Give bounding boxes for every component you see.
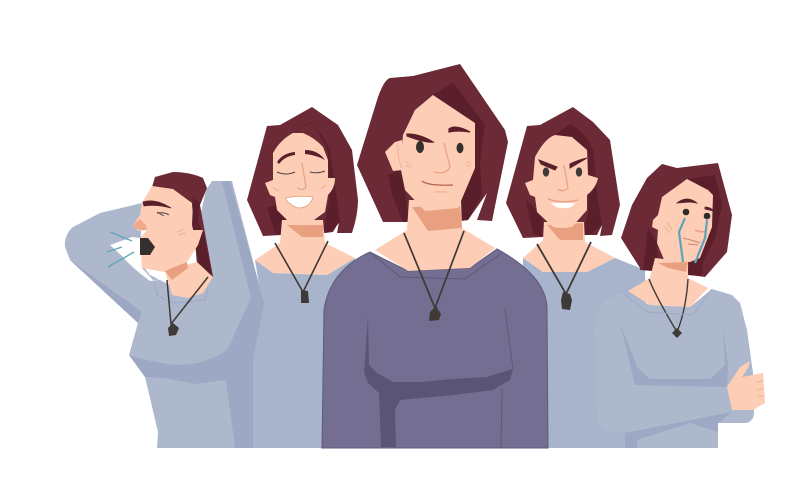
- hair: [357, 64, 508, 222]
- breath lines: [107, 232, 134, 267]
- collar seam: [623, 289, 712, 315]
- hair: [152, 172, 213, 277]
- face: [652, 179, 713, 262]
- chest and neck: [375, 200, 495, 271]
- sweater: [595, 289, 754, 448]
- raised arm and torso: [65, 181, 264, 448]
- open mouth: [140, 238, 155, 255]
- eyebrows: [407, 127, 470, 142]
- sweater folds: [364, 317, 513, 447]
- hair: [621, 163, 732, 277]
- chest and neck: [628, 258, 708, 307]
- figure: laughing woman, second from left: [247, 107, 358, 448]
- yawn puff: [110, 237, 167, 281]
- collar seam: [370, 252, 502, 279]
- nose: [434, 143, 450, 173]
- figure: yawning woman, left: [65, 172, 264, 448]
- sweater folds: [620, 323, 728, 387]
- eyes: [416, 141, 424, 153]
- necklace: [404, 231, 464, 308]
- necklace: [649, 279, 688, 332]
- tears: [679, 218, 707, 263]
- figure: smirking woman, second from right: [506, 107, 650, 448]
- hand: [727, 361, 765, 410]
- sweater: [322, 249, 548, 448]
- cheek lines: [405, 161, 471, 168]
- face: [400, 95, 475, 211]
- necklace: [167, 277, 208, 324]
- figure: confident woman, centre: [322, 64, 548, 448]
- mouth: [422, 181, 453, 185]
- ear: [385, 140, 403, 171]
- chest skin: [165, 262, 213, 298]
- collar seam: [154, 280, 208, 303]
- face and neck: [133, 186, 203, 272]
- figure: crying woman, right: [595, 163, 765, 448]
- pendant: [429, 306, 441, 321]
- sweater shading: [70, 260, 142, 323]
